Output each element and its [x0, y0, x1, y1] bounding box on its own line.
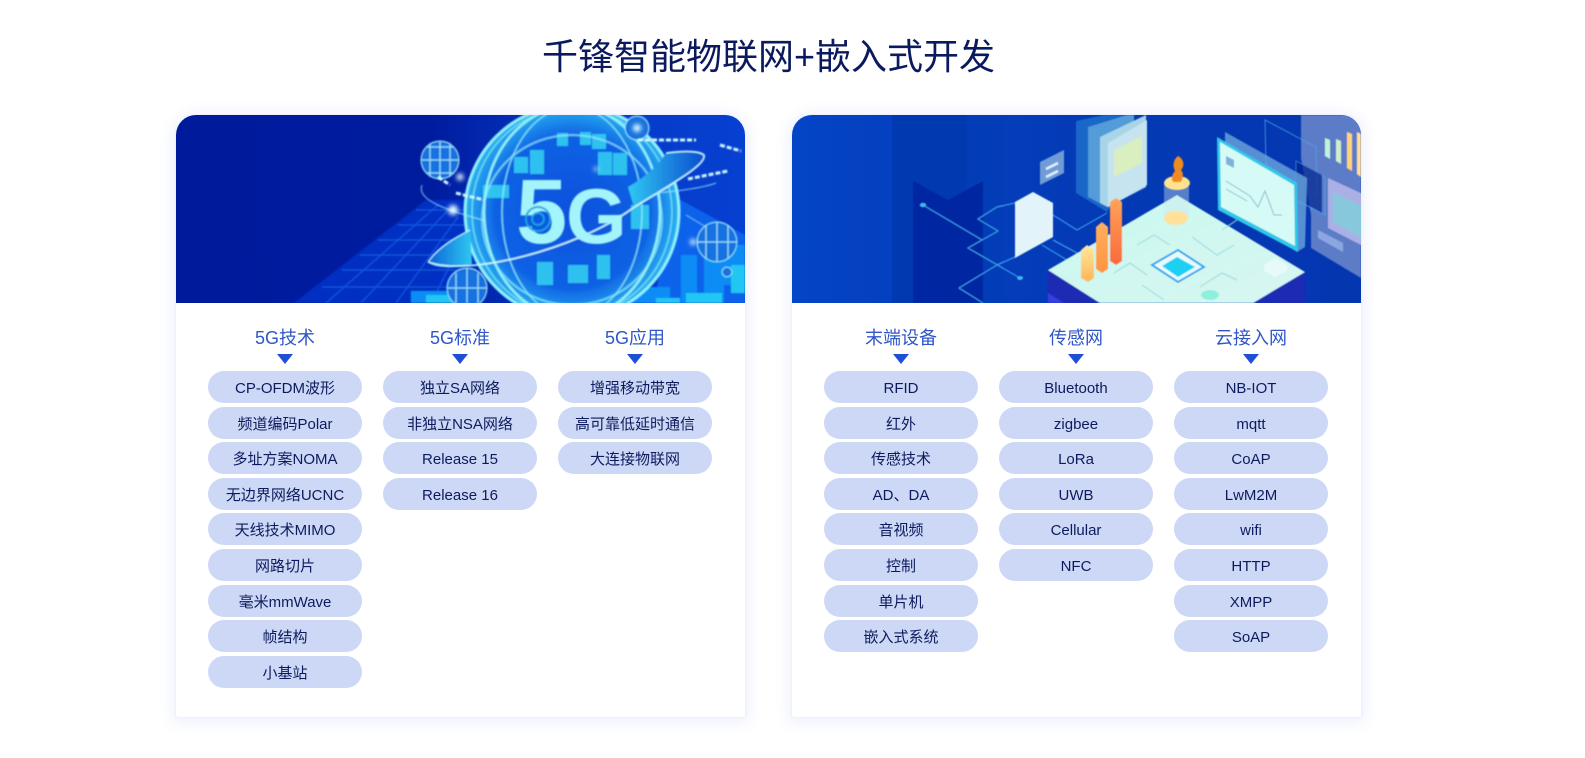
small cube	[1264, 258, 1287, 277]
column: 5G技术: 天线技术MIMO	[235, 522, 335, 539]
column: 传感网: NFC	[1061, 558, 1091, 575]
column: 5G标准	[383, 328, 537, 510]
column: 5G技术: 频道编码Polar	[237, 416, 333, 433]
column: 传感网: LoRa	[1058, 451, 1094, 468]
panel: IoT and embedded	[792, 115, 1361, 717]
heading: 末端设备	[865, 328, 937, 348]
orbit wings	[428, 230, 472, 268]
chip	[1114, 220, 1237, 300]
column: 末端设备: RFID	[884, 380, 918, 397]
column: 5G技术: 帧结构	[262, 629, 308, 646]
column: 5G应用	[558, 328, 712, 474]
column: 末端设备: 控制	[886, 558, 916, 575]
heading: 5G技术	[255, 328, 315, 348]
panel: 5G	[176, 115, 745, 717]
column: 传感网: Bluetooth	[1044, 380, 1108, 397]
column: 5G标准: Release 16	[422, 487, 498, 504]
column: 云接入网: CoAP	[1231, 451, 1271, 468]
5G lettering: G	[566, 172, 627, 260]
small spheres	[421, 116, 737, 308]
column: 5G应用: 大连接物联网	[590, 451, 680, 468]
screen	[1225, 132, 1307, 252]
column: 5G技术: 小基站	[262, 665, 308, 682]
column: 云接入网: HTTP	[1231, 558, 1271, 575]
image: 5G globe banner	[176, 115, 745, 303]
column: 传感网: Cellular	[1051, 522, 1101, 539]
column: 末端设备: 嵌入式系统	[863, 629, 938, 646]
column: 末端设备: 音视频	[878, 522, 924, 539]
beaker	[1164, 183, 1189, 218]
column: 传感网	[999, 328, 1153, 581]
column: 5G标准: Release 15	[422, 451, 498, 468]
column: 5G技术: 网路切片	[255, 558, 315, 575]
perspective ground	[294, 200, 476, 303]
column: 末端设备: 传感技术	[871, 451, 931, 468]
column: 5G技术: 无边界网络UCNC	[226, 487, 344, 504]
column: 云接入网: mqtt	[1236, 416, 1266, 433]
column: 末端设备: 红外	[886, 416, 916, 433]
stacked sheets	[1076, 115, 1134, 212]
right panel	[1301, 115, 1361, 278]
column: 云接入网: XMPP	[1230, 594, 1272, 611]
heading: 云接入网	[1215, 328, 1287, 348]
column: 末端设备: AD、DA	[873, 487, 929, 504]
column: 末端设备	[824, 328, 978, 652]
heading: 5G应用	[605, 328, 665, 348]
document	[1015, 192, 1053, 258]
arrow	[1243, 354, 1259, 364]
column: 5G标准: 独立SA网络	[420, 380, 500, 397]
small note	[1040, 150, 1064, 185]
column: 5G技术: 毫米mmWave	[239, 594, 331, 611]
column: 5G标准: 非独立NSA网络	[407, 416, 513, 433]
column: 云接入网: wifi	[1240, 522, 1262, 539]
column: 云接入网: NB-IOT	[1226, 380, 1276, 397]
5G lettering: 5	[516, 161, 567, 263]
arrow	[1068, 354, 1084, 364]
table sides	[1048, 270, 1100, 303]
column: 5G应用: 增强移动带宽	[590, 380, 680, 397]
column: 5G技术: CP-OFDM波形	[235, 380, 335, 397]
image: isometric IoT banner	[792, 115, 1361, 303]
column: 云接入网	[1174, 328, 1328, 652]
heading: 5G标准	[430, 328, 490, 348]
globe	[465, 105, 679, 319]
arrow	[277, 354, 293, 364]
column: 云接入网: SoAP	[1232, 629, 1270, 646]
circuit lines	[923, 203, 1107, 303]
column: 5G技术	[208, 328, 362, 688]
chart bars on panel	[1325, 132, 1361, 177]
column: 云接入网: LwM2M	[1225, 487, 1277, 504]
column: 传感网: zigbee	[1054, 416, 1098, 433]
arrow	[893, 354, 909, 364]
arrow	[452, 354, 468, 364]
heading: 传感网	[1049, 328, 1103, 348]
column: 5G应用: 高可靠低延时通信	[575, 416, 695, 433]
dark ribbon	[913, 181, 983, 303]
arrow	[627, 354, 643, 364]
5G lettering	[516, 161, 627, 263]
bars	[1081, 245, 1094, 282]
table top	[1048, 195, 1305, 303]
column: 末端设备: 单片机	[878, 594, 924, 611]
column: 5G技术: 多址方案NOMA	[232, 451, 338, 468]
title: 千锋智能物联网+嵌入式开发	[542, 36, 995, 77]
column: 传感网: UWB	[1058, 487, 1094, 504]
